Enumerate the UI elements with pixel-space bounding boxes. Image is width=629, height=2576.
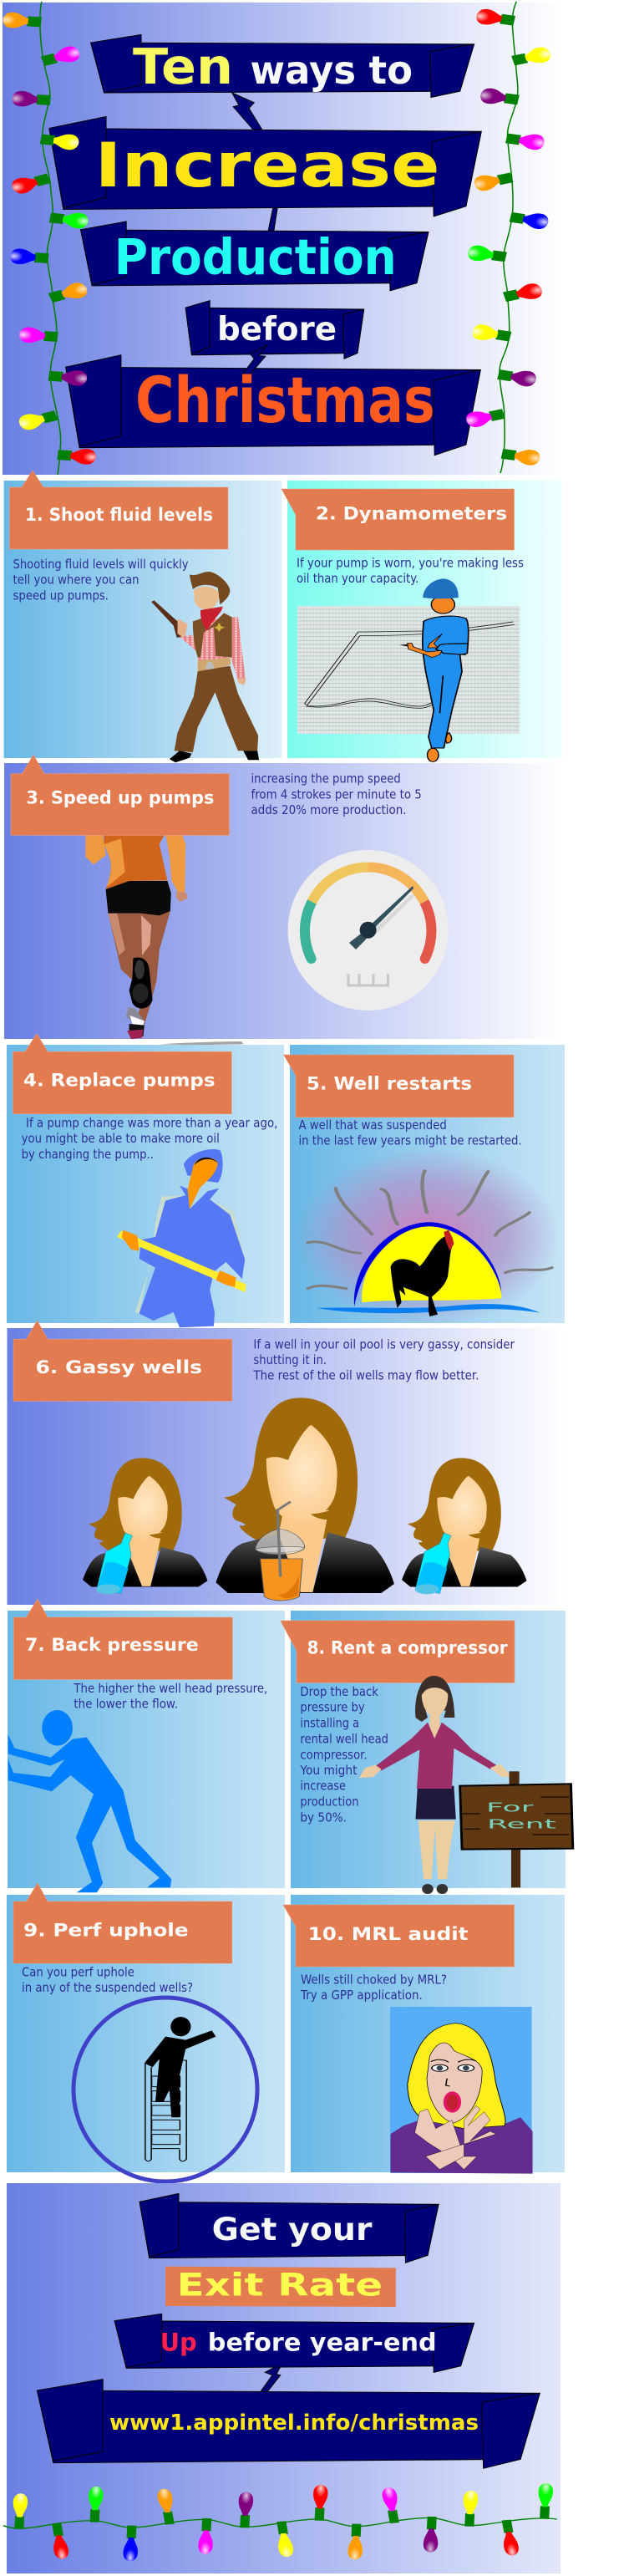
call to action text: www1.appintel.info/christmas [109, 2411, 479, 2436]
icon: worker with pipe [117, 1149, 246, 1327]
panel: 4 replace pumps [7, 1034, 284, 1327]
call to action text [109, 2212, 479, 2436]
text block 3: from 4 strokes per minute to 5 [251, 787, 422, 802]
text block 10: Wells still choked by MRL? [301, 1972, 447, 1987]
icon: businesswoman [359, 1676, 512, 1894]
callout tag 7: 7. Back pressure [25, 1635, 199, 1656]
panel: 6 gassy wells [7, 1321, 566, 1605]
panel: 5 well restarts [284, 1045, 565, 1326]
chart: speed gauge [288, 850, 449, 1011]
callout tag 9: 9. Perf uphole [23, 1921, 189, 1942]
header title text [95, 38, 439, 437]
icon: woman left with bottle [83, 1458, 207, 1594]
text block 8: rental well head [300, 1731, 388, 1746]
text block 10: Try a GPP application. [300, 1988, 423, 2003]
header title text: Ten [133, 38, 233, 95]
callout tag 3 [11, 755, 229, 835]
text block 8: Drop the back [300, 1684, 378, 1699]
callout tag 10 [283, 1905, 515, 1967]
panel: 2 dynamometers [282, 481, 562, 761]
text block 8 [300, 1684, 388, 1825]
text block 8: You might [300, 1763, 358, 1778]
callout tag 2 [282, 489, 515, 550]
shadow of runner [160, 1041, 244, 1045]
icon: pushing man [8, 1710, 171, 1892]
header title text: before [217, 311, 337, 349]
text block 8: compressor. [300, 1747, 368, 1762]
callout tag 9 [13, 1883, 232, 1963]
text block 2: If your pump is worn, you're making less [297, 556, 524, 571]
string lights right [464, 2, 553, 473]
call to action text: Exit Rate [177, 2268, 383, 2304]
text block 5: A well that was suspended [299, 1117, 447, 1133]
callout tag 6: 6. Gassy wells [35, 1357, 202, 1378]
icon: ladder in circle [74, 1998, 257, 2181]
callout tag 3: 3. Speed up pumps [26, 788, 214, 809]
text block 7: The higher the well head pressure, [74, 1681, 267, 1696]
text block 7: the lower the flow. [74, 1697, 178, 1712]
text block 8: installing a [300, 1716, 359, 1731]
icon: woman right with bottle [402, 1458, 527, 1594]
icon: for rent sign [460, 1771, 573, 1887]
call to action text: Get your [212, 2212, 373, 2248]
text block 8: production [300, 1795, 359, 1810]
text block 4: you might be able to make more oil [22, 1131, 220, 1146]
text block 1: speed up pumps. [13, 588, 109, 603]
icon: engineer [399, 578, 469, 761]
icon: cowboy [151, 572, 259, 762]
text block 9: Can you perf uphole [22, 1964, 134, 1979]
text block 9 [22, 1964, 193, 1995]
text block 6: If a well in your oil pool is very gassy, consider [253, 1336, 515, 1352]
text block 3: increasing the pump speed [251, 771, 401, 787]
text block 1: Shooting fluid levels will quickly [13, 557, 189, 572]
icon: shocked woman [390, 2007, 533, 2174]
text block 9: in any of the suspended wells? [22, 1980, 193, 1995]
callout tag 10: 10. MRL audit [308, 1924, 468, 1945]
text block 6: The rest of the oil wells may flow better. [253, 1368, 479, 1383]
panel: 10 MRL audit [283, 1895, 565, 2174]
string lights bottom [3, 2483, 557, 2562]
icon: woman centre with juice cup [216, 1397, 394, 1601]
callout tag 1 [10, 471, 228, 549]
header title text: Production [114, 228, 397, 286]
text block 4: If a pump change was more than a year ago, [26, 1115, 277, 1130]
text block 5: in the last few years might be restarted. [299, 1133, 522, 1148]
text block 2: oil than your capacity. [297, 571, 418, 586]
call to action text: Up [160, 2329, 197, 2357]
callout tag 7 [13, 1599, 232, 1679]
text block 6: shutting it in. [253, 1352, 327, 1367]
text block 2 [297, 556, 524, 586]
header title text: ways to [251, 48, 413, 93]
callout tag 4: 4. Replace pumps [23, 1070, 216, 1091]
text block 7 [74, 1681, 267, 1712]
text block 4: by changing the pump.. [22, 1147, 154, 1162]
text block 8: increase [300, 1779, 346, 1794]
icon: for rent sign: For [486, 1800, 535, 1815]
string lights left [2, 2, 97, 475]
panel: 1 shoot fluid levels [3, 471, 282, 762]
panel: 8 rent a compressor [281, 1611, 573, 1894]
call to action text: before year-end [208, 2329, 437, 2357]
callout tag 1: 1. Shoot fluid levels [25, 505, 213, 526]
callout tag 4 [13, 1034, 231, 1114]
panel: 3 speed up pumps [4, 755, 564, 1045]
panel: header [2, 2, 562, 475]
text block 6 [253, 1336, 515, 1383]
text block 1: tell you where you can [13, 573, 139, 588]
icon: three women drinking [83, 1397, 527, 1601]
text block 3 [251, 771, 422, 817]
text block 4 [22, 1115, 277, 1162]
callout tag 5: 5. Well restarts [307, 1073, 472, 1094]
text block 8: by 50%. [300, 1810, 347, 1825]
text block 5 [299, 1117, 522, 1148]
call to action ribbons [37, 2193, 540, 2468]
header title text: Christmas [135, 363, 435, 437]
callout tag 8: 8. Rent a compressor [307, 1637, 508, 1658]
chart: dynamometer card [297, 606, 520, 734]
callout tag 2: 2. Dynamometers [316, 504, 507, 525]
icon: for rent sign: Rent [487, 1817, 556, 1832]
callout tag 6 [13, 1321, 232, 1401]
callout tag 8 [281, 1621, 515, 1683]
text block 8: pressure by [300, 1700, 365, 1715]
text block 3: adds 20% more production. [251, 802, 406, 817]
panel: call to action [3, 2183, 561, 2573]
panel: 7 back pressure [8, 1599, 285, 1892]
callout tag 5 [284, 1055, 514, 1117]
header title text: Increase [95, 130, 439, 201]
icon: rooster and sunrise [295, 1148, 561, 1326]
text block 10 [300, 1972, 447, 2003]
header ribbons [49, 34, 481, 456]
icon: runner [85, 833, 188, 1039]
text block 1 [13, 557, 189, 603]
panel: 9 perf uphole [7, 1883, 285, 2181]
